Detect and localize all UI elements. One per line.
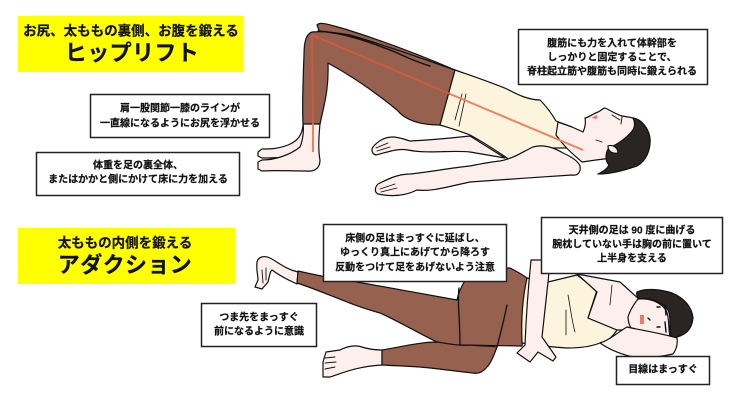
- title block: adduction: [18, 228, 235, 284]
- callout: toes forward: [202, 304, 316, 346]
- callout: upper body support: [542, 218, 722, 274]
- title block: adduction: 太ももの内側を鍛える: [58, 234, 192, 250]
- face: [628, 299, 670, 336]
- callout: abdominal tension: しっかりと固定することで、: [547, 52, 677, 64]
- callout: abdominal tension: 脊柱起立筋や腹筋も同時に鍛えられる: [527, 64, 697, 78]
- callout: leg raise: 床側の足はまっすぐに延ばし、: [345, 232, 485, 244]
- supporting arm: [517, 260, 556, 362]
- ear: [608, 145, 618, 153]
- far foot: [258, 125, 305, 158]
- thigh crease: [318, 31, 430, 66]
- callout: shoulder hip knee line: 一直線になるようにお尻を浮かせる: [100, 116, 260, 130]
- top creases: [455, 94, 466, 126]
- hair: [637, 289, 693, 338]
- lower foot: [323, 346, 382, 377]
- callout: upper body support: 腕枕していない手は胸の前に置いて: [552, 238, 712, 250]
- eyes and nose: [648, 305, 666, 332]
- lower foot toes: [325, 357, 336, 369]
- callout: leg raise: [324, 224, 506, 282]
- top creases: [566, 285, 612, 335]
- near leg: [303, 32, 455, 125]
- callout: abdominal tension: [518, 30, 708, 84]
- lips: [591, 115, 597, 119]
- raised leg and hip: [297, 268, 527, 346]
- raised foot toes: [262, 268, 266, 283]
- title block: adduction: アダクション: [58, 252, 192, 278]
- callout: upper body support: 上半身を支える: [597, 252, 667, 264]
- hip line: [458, 288, 507, 347]
- callout: toes forward: 前になるように意識: [214, 324, 304, 338]
- callout: leg raise: 反動をつけて足をあげないよう注意: [335, 260, 495, 274]
- illustration: woman doing hip lift: [258, 23, 650, 196]
- callout: body weight on feet: 体重を足の裏全体、: [93, 158, 183, 172]
- callout: toes forward: つま先をまっすぐ: [219, 310, 299, 324]
- raised foot: [255, 257, 298, 289]
- lower leg: [382, 342, 497, 373]
- near foot: [258, 123, 320, 171]
- hair: [598, 118, 650, 174]
- alignment line: skin and top part: [313, 94, 583, 152]
- callout: body weight on feet: またはかかと側にかけて床に力を加える: [48, 172, 228, 186]
- lips: [640, 315, 644, 324]
- tank top: [440, 70, 580, 162]
- eye and brow: [596, 115, 622, 142]
- neck and face: [556, 108, 640, 162]
- callout: shoulder hip knee line: 肩一股関節一膝のラインが: [120, 102, 240, 114]
- callout: abdominal tension: 腹筋にも力を入れて体幹部を: [547, 36, 677, 50]
- far hand fingers: [376, 143, 390, 151]
- callout: gaze straight: [616, 356, 710, 384]
- callout: body weight on feet: [36, 152, 240, 196]
- callout: gaze straight: 目線はまっすぐ: [628, 362, 698, 376]
- near hand fingers: [380, 184, 397, 192]
- title block: hip lift: [18, 16, 243, 72]
- illustration: woman doing adduction: [255, 257, 693, 377]
- title block: hip lift: お尻、太ももの裏側、お腹を鍛える: [23, 22, 239, 38]
- tank top: [522, 275, 617, 348]
- callout: shoulder hip knee line: [90, 94, 270, 138]
- alignment line: leg part on brown: [312, 35, 450, 124]
- chest skin: [577, 274, 640, 330]
- far leg: [317, 23, 455, 125]
- arm under head: [600, 327, 677, 357]
- title block: hip lift: ヒップリフト: [65, 40, 199, 66]
- near arm and shoulder: [375, 146, 580, 196]
- far arm: [372, 136, 505, 158]
- callout: upper body support: 天井側の足は 90 度に曲げる: [569, 224, 695, 236]
- callout: leg raise: ゆっくり真上にあげてから降ろす: [340, 246, 490, 258]
